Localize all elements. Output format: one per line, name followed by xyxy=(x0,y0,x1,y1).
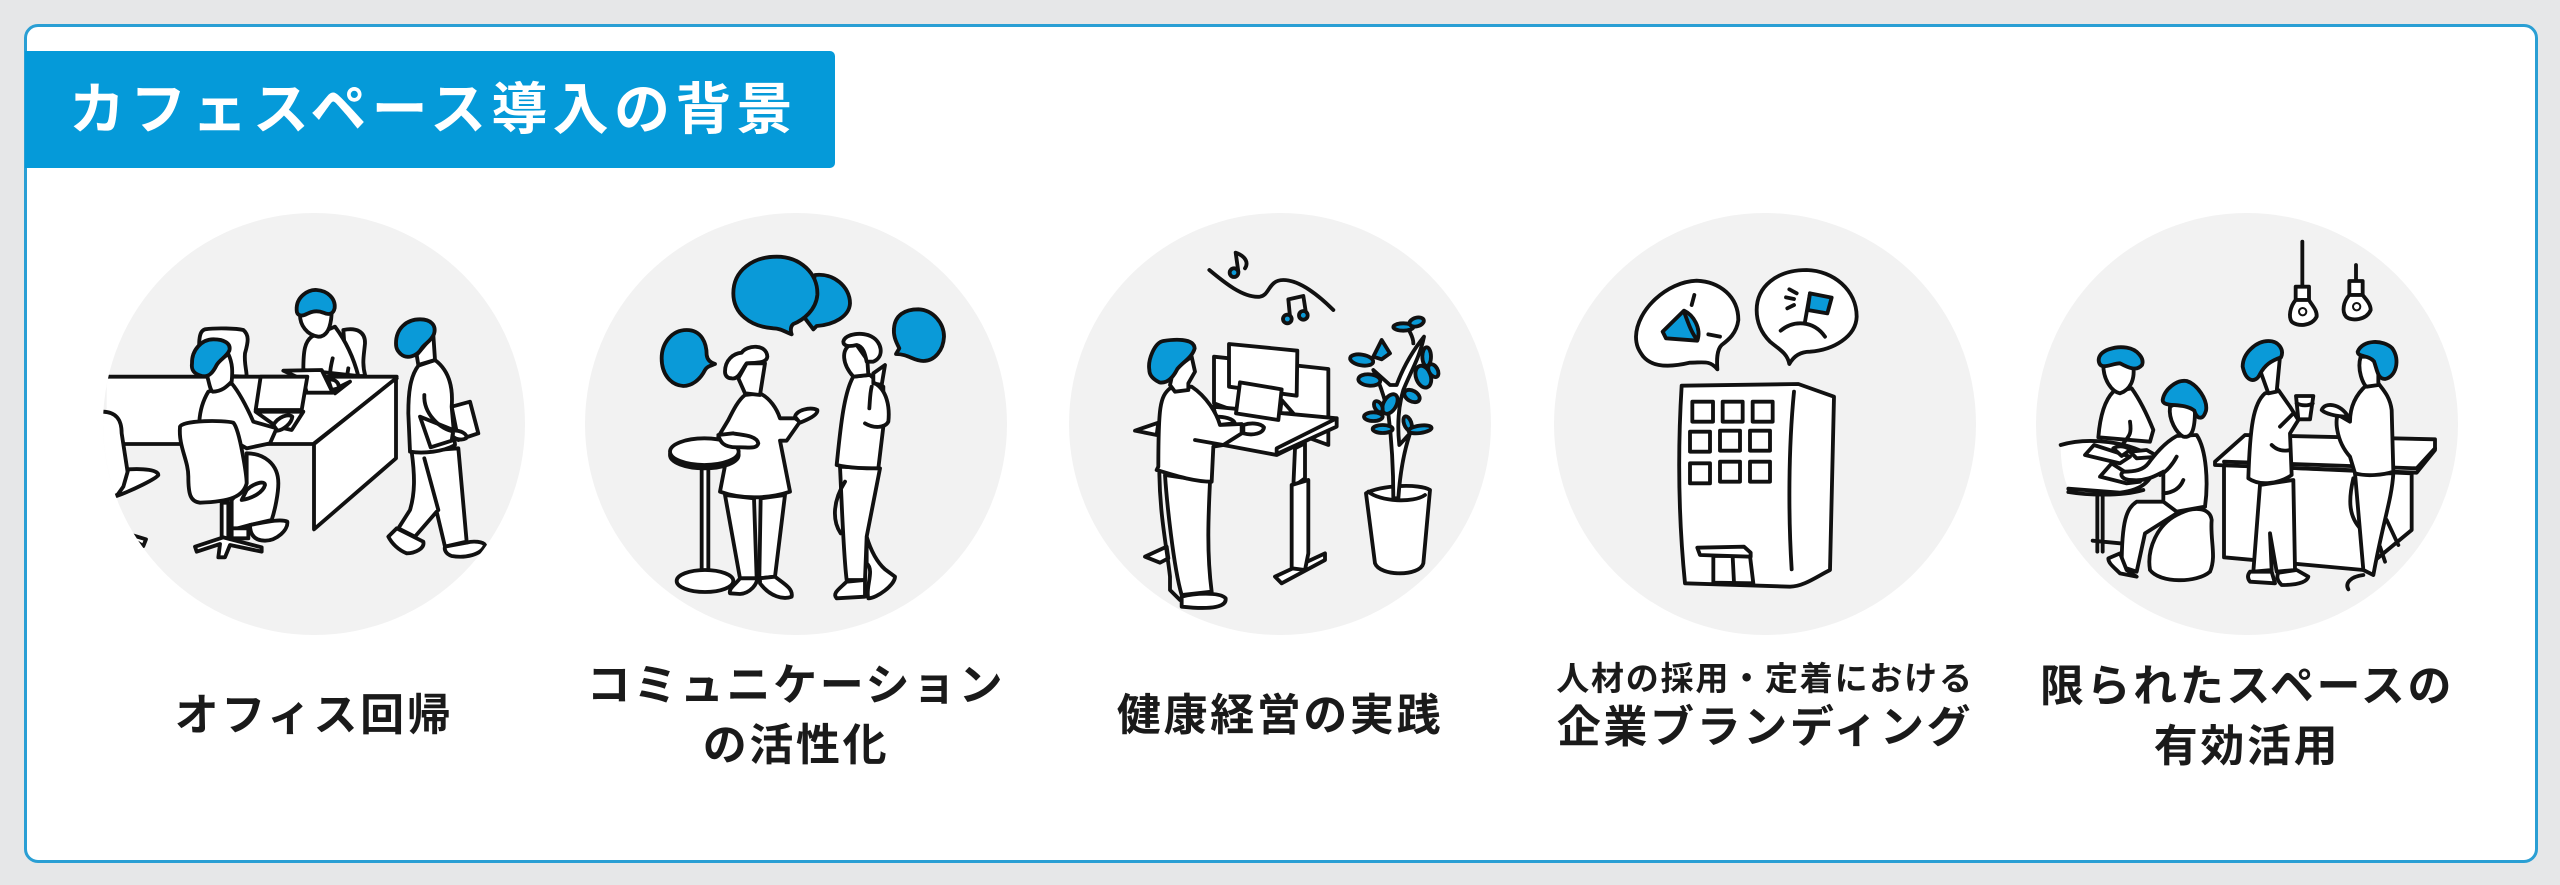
panel: corporate branding xyxy=(1554,213,1976,752)
title banner: カフェスペース導入の背景 xyxy=(69,78,798,141)
label: 限られたスペースの xyxy=(2040,662,2454,711)
label: の活性化 xyxy=(703,721,889,770)
label: コミュニケーション xyxy=(587,661,1005,710)
label: large line: 企業ブランディング xyxy=(1557,703,1973,752)
panel: office return xyxy=(103,213,525,740)
label: 有効活用 xyxy=(2154,722,2340,771)
label: 健康経営の実践 xyxy=(1117,691,1443,740)
label xyxy=(587,661,1005,770)
illustration: cafe counter and people xyxy=(2036,213,2458,635)
label: small line: 人材の採用・定着における xyxy=(1556,660,1974,697)
panel: health management xyxy=(1069,213,1491,740)
illustration: people at office desk xyxy=(103,213,525,635)
illustration: standing desk and plant xyxy=(1069,213,1491,635)
panel: effective use of space xyxy=(2036,213,2458,771)
label xyxy=(2040,662,2454,771)
label: オフィス回帰 xyxy=(175,691,453,740)
illustration: two people talking xyxy=(585,213,1007,635)
panel: communication xyxy=(585,213,1007,770)
title banner xyxy=(25,51,835,168)
illustration: building with speech bubbles xyxy=(1554,213,1976,635)
